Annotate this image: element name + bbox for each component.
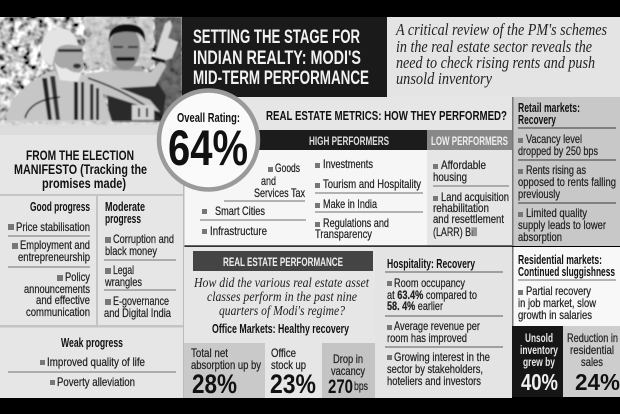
title panel: MID-TERM PERFORMANCE bbox=[193, 68, 369, 89]
panel: real estate performance bbox=[184, 247, 375, 399]
panel: hospitality: Hospitality: Recovery bbox=[387, 257, 475, 271]
stat: unsold inventory: Unsold bbox=[525, 331, 553, 345]
subtitle panel: unsold inventory bbox=[396, 69, 492, 88]
stat: drop in vacancy: Drop in bbox=[333, 352, 363, 366]
panel: retail markets: Rents rising as bbox=[526, 163, 586, 177]
good progress column: entrepreneurship bbox=[18, 250, 90, 264]
high performers list: Transparency bbox=[315, 227, 372, 241]
panel: residential markets: growth in salaries bbox=[518, 308, 592, 322]
moderate progress column: Moderate bbox=[105, 200, 145, 214]
panel: real estate metrics bbox=[183, 97, 512, 246]
stat: drop in vacancy: vacancy bbox=[331, 364, 365, 378]
stat: total net absorption: 28% bbox=[192, 369, 237, 399]
weak progress section: Poverty alleviation bbox=[57, 375, 135, 389]
photo: Modi speaking at podium bbox=[0, 17, 182, 140]
title panel: SETTING THE STAGE FOR bbox=[193, 27, 360, 48]
good progress column: announcements bbox=[24, 282, 90, 296]
stat: drop in vacancy bbox=[322, 343, 375, 398]
good progress column: Price stabilisation bbox=[16, 220, 90, 234]
moderate progress column bbox=[104, 200, 176, 320]
low performers list: Affordable bbox=[441, 158, 486, 172]
panel: hospitality: Room occupancy bbox=[394, 276, 465, 290]
moderate progress column: wrangles bbox=[104, 275, 142, 289]
low performers header: LOW PERFORMERS bbox=[431, 134, 508, 148]
good progress column: Employment and bbox=[20, 238, 90, 252]
panel: hospitality: sector by stakeholders, bbox=[387, 362, 483, 376]
good progress column: Good progress bbox=[30, 200, 90, 214]
stat: reduction in residential sales bbox=[563, 326, 620, 397]
stat: unsold inventory: inventory bbox=[520, 343, 558, 357]
panel: hospitality: 58. 4% earlier bbox=[387, 299, 443, 313]
stat: unsold inventory: grew by bbox=[523, 355, 555, 369]
subtitle panel bbox=[387, 17, 620, 97]
moderate progress column: Corruption and bbox=[113, 232, 174, 246]
high performers header: HIGH PERFORMERS bbox=[309, 134, 389, 148]
high performers list: Smart Cities bbox=[215, 204, 265, 218]
moderate progress column: and Digital India bbox=[104, 306, 171, 320]
performance question: classes perform in the past nine bbox=[207, 290, 357, 305]
panel: hospitality bbox=[375, 247, 512, 398]
panel: retail markets: Recovery bbox=[518, 113, 556, 127]
panel: retail markets: absorption bbox=[518, 230, 562, 244]
moderate progress column: E-governance bbox=[113, 294, 169, 308]
panel: retail markets: Limited quality bbox=[526, 206, 587, 220]
overall rating badge: Oveall Rating: bbox=[177, 110, 240, 125]
good progress column: Policy bbox=[65, 270, 90, 284]
title panel bbox=[182, 17, 387, 97]
low performers list: (LARR) Bill bbox=[433, 225, 477, 239]
stat: office stock bbox=[266, 343, 322, 399]
panel: residential markets: in job market, slow bbox=[518, 296, 596, 310]
stat: office stock: stock up bbox=[271, 358, 306, 372]
panel: hospitality: Growing interest in the bbox=[394, 350, 490, 364]
stat: office stock: 23% bbox=[270, 369, 316, 399]
low performers header bbox=[427, 130, 512, 150]
stat: unsold inventory bbox=[512, 326, 563, 397]
performance header bar bbox=[193, 251, 373, 271]
high performers list: Investments bbox=[323, 157, 373, 171]
panel: retail markets: Vacancy level bbox=[526, 132, 582, 146]
moderate progress column: black money bbox=[105, 244, 157, 258]
panel: retail markets: Retail markets: bbox=[518, 101, 580, 115]
high performers list: and bbox=[261, 174, 276, 188]
high performers list: Regulations and bbox=[323, 216, 389, 230]
high performers list: Tourism and Hospitality bbox=[323, 177, 421, 191]
low performers list: housing bbox=[433, 170, 467, 184]
good progress column: communication bbox=[26, 305, 90, 319]
stat: total net absorption: absorption up by bbox=[191, 358, 261, 372]
moderate progress column: progress bbox=[105, 212, 141, 226]
performance question: How did the various real estate asset bbox=[193, 276, 370, 291]
manifesto heading bbox=[14, 147, 147, 191]
low performers list: Land acquisition bbox=[441, 190, 509, 204]
panel: hospitality: Average revenue per bbox=[394, 319, 480, 333]
manifesto heading: promises made) bbox=[42, 175, 126, 191]
low performers list bbox=[433, 158, 509, 239]
manifesto heading: FROM THE ELECTION bbox=[26, 147, 134, 163]
metrics heading: REAL ESTATE METRICS: HOW THEY PERFORMED? bbox=[266, 108, 507, 123]
high performers header bbox=[240, 130, 427, 150]
high performers list bbox=[183, 150, 427, 245]
panel: retail markets: previously bbox=[518, 187, 560, 201]
panel: hospitality: at 63.4% compared to bbox=[387, 288, 477, 302]
panel: hospitality: hoteliers and investors bbox=[387, 374, 481, 388]
stat: unsold inventory: 40% bbox=[521, 369, 558, 395]
high performers list: Make in India bbox=[323, 197, 377, 211]
good progress column: and effective bbox=[36, 293, 90, 307]
panel: retail markets bbox=[512, 97, 620, 246]
performance question: quarters of Modi's regime? bbox=[219, 304, 345, 319]
stat: total net absorption: Total net bbox=[191, 346, 229, 360]
overall rating badge: 64% bbox=[168, 120, 248, 176]
stat: reduction in residential sales: sales bbox=[581, 355, 603, 369]
high performers list: Goods bbox=[275, 161, 300, 175]
performance header bar: REAL ESTATE PERFORMANCE bbox=[223, 255, 343, 269]
weak progress section: Weak progress bbox=[61, 336, 123, 350]
panel: residential markets: Partial recovery bbox=[526, 284, 591, 298]
stat: total net absorption bbox=[184, 343, 265, 399]
stat: drop in vacancy: 270 bbox=[328, 377, 353, 398]
manifesto heading: MANIFESTO (Tracking the bbox=[14, 161, 147, 177]
title panel: INDIAN REALTY: MODI'S bbox=[193, 48, 361, 69]
weak progress section: Improved quality of life bbox=[47, 355, 145, 369]
panel: residential markets bbox=[512, 247, 620, 326]
low performers list: rehabilitation bbox=[433, 201, 489, 215]
high performers list: Services Tax bbox=[254, 186, 305, 200]
high performers list: Infrastructure bbox=[210, 224, 267, 238]
office markets subheading: Office Markets: Healthy recovery bbox=[212, 322, 349, 336]
weak progress section bbox=[8, 336, 176, 389]
panel: election manifesto bbox=[0, 135, 184, 398]
overall rating badge bbox=[159, 90, 258, 190]
good progress column bbox=[8, 200, 90, 319]
stat: drop in vacancy: bps bbox=[354, 379, 368, 393]
performance question bbox=[193, 276, 370, 319]
low performers list: and resettlement bbox=[433, 212, 505, 226]
stat: reduction in residential sales: 24% bbox=[575, 369, 620, 395]
stat: office stock: Office bbox=[271, 346, 296, 360]
panel: hospitality: room has improved bbox=[387, 331, 467, 345]
moderate progress column: Legal bbox=[113, 263, 134, 277]
